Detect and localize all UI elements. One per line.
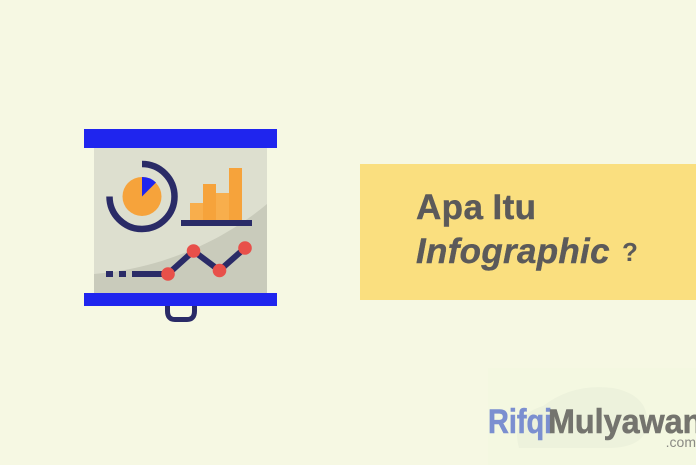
- bottom bar: [84, 293, 277, 306]
- pie chart: [110, 164, 174, 229]
- title line 1: Apa Itu: [416, 188, 536, 227]
- handle: [168, 306, 194, 320]
- top bar: [84, 129, 277, 148]
- line chart: [106, 241, 252, 281]
- title line 2: Infographic: [416, 232, 610, 271]
- screen panel: [94, 148, 267, 293]
- logo text: Rifqi: [488, 403, 552, 441]
- logo cloud: [488, 368, 696, 465]
- watermark logo: [488, 368, 696, 465]
- title panel: [360, 164, 696, 300]
- bar chart: [181, 168, 252, 226]
- question mark: ?: [622, 237, 638, 267]
- logo suffix: .com: [666, 434, 696, 450]
